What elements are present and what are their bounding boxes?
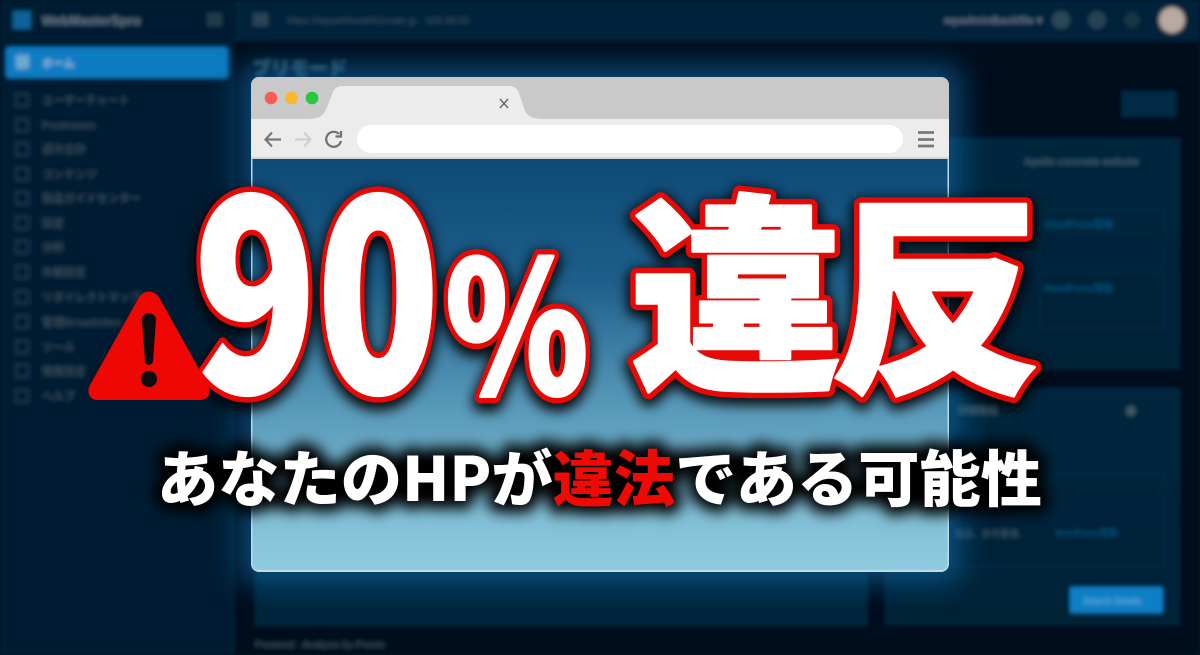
right panels: WordPress情報 xyxy=(1055,527,1117,538)
sidebar: コンテンツ xyxy=(42,168,97,181)
headline outline: % xyxy=(445,184,589,447)
icon: reload xyxy=(326,131,341,147)
top bar: wpadminBackfile ▾ xyxy=(943,15,1043,27)
right panels: Search Details xyxy=(1083,596,1142,606)
top bar: https://wpwebhost001node.jp : 103:38:55 xyxy=(287,16,470,27)
headline outline: 違 xyxy=(630,129,842,436)
sidebar: 設定 xyxy=(42,217,64,230)
sidebar: リダイレクトマップ xyxy=(42,290,141,304)
sidebar: Postviews xyxy=(42,120,96,132)
sidebar: 分析 xyxy=(42,240,64,254)
headline fill: 反 xyxy=(830,131,1042,438)
headline outline: 反 xyxy=(830,131,1042,438)
headline shadow: 違 xyxy=(630,133,842,440)
sidebar: 製品ガイドセンター xyxy=(42,191,141,205)
sidebar xyxy=(0,0,235,655)
browser tab xyxy=(302,86,548,119)
right panels: Apollo concrete website xyxy=(1024,157,1139,168)
tab close icon xyxy=(500,99,508,108)
top bar xyxy=(235,0,1200,41)
sidebar: WebMasterSpro xyxy=(42,13,141,28)
headline fill: % xyxy=(445,184,589,447)
window controls xyxy=(265,92,318,104)
sidebar: 週次合計 xyxy=(42,142,86,156)
glow behind browser window xyxy=(238,65,962,584)
sidebar: 情報設定 xyxy=(42,364,86,378)
sidebar: ホーム xyxy=(42,57,75,70)
headline fill xyxy=(194,89,1042,468)
right panels xyxy=(885,138,1180,626)
headline outline xyxy=(194,89,1042,468)
sidebar: ヘルプ xyxy=(42,390,75,403)
headline fill: 90 xyxy=(194,89,440,468)
warning triangle shadow xyxy=(92,298,204,388)
main area: Powered : Analysis by Presto xyxy=(255,640,385,651)
headline: 90%違反 xyxy=(194,89,1042,473)
browser chrome xyxy=(251,77,949,159)
subtitle shadow: あなたのHPが違法である可能性 xyxy=(157,430,1042,519)
headline outline: 90 xyxy=(194,89,440,468)
right panels: WordPress情報 xyxy=(1044,282,1113,295)
headline fill: 違 xyxy=(630,129,842,436)
browser window xyxy=(251,77,949,572)
icon: menu xyxy=(918,132,934,146)
subtitle xyxy=(157,430,1042,519)
sidebar: 外観設定 xyxy=(42,265,86,279)
warning triangle icon xyxy=(88,292,210,400)
headline shadow: 90 xyxy=(194,94,440,473)
headline shadow: 反 xyxy=(830,135,1042,442)
subtitle text: あなたのHPが違法である可能性 xyxy=(157,430,1042,519)
main area: プリモード xyxy=(252,58,347,80)
right panels: WordPress管理 xyxy=(1044,218,1113,231)
right panels: 製品、許可管理、 xyxy=(955,528,1027,539)
right panels: 詳細情報 xyxy=(958,404,998,417)
sidebar: ユーザーチャート xyxy=(42,94,130,107)
headline shadow xyxy=(194,94,1042,473)
browser content area xyxy=(252,159,948,570)
icon: back arrow xyxy=(266,132,281,146)
headline shadow: % xyxy=(445,189,589,452)
sidebar: 管理Broadsites xyxy=(42,315,121,329)
main area xyxy=(235,41,1200,655)
address bar xyxy=(357,125,903,153)
icon: forward arrow xyxy=(295,132,310,146)
sidebar: ツール xyxy=(42,342,75,354)
